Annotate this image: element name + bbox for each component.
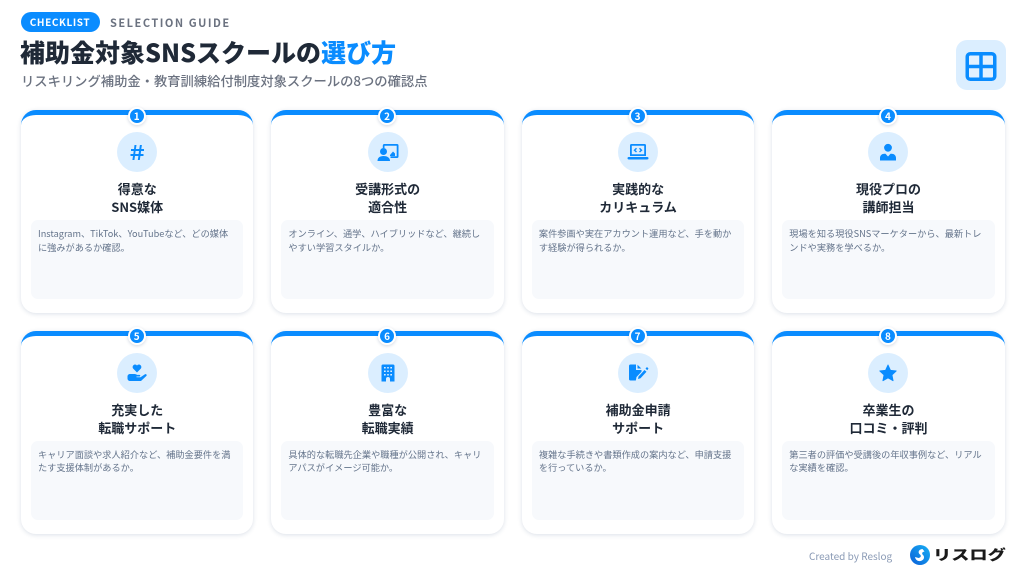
heading <box>856 179 921 216</box>
subtitle: リスキリング補助金・教育訓練給付制度対象スクールの8つの確認点 <box>21 71 428 90</box>
number 2: 2 <box>384 108 390 122</box>
heading: 受講形式の <box>355 179 420 198</box>
description: 複雑な手続きや書類作成の案内など、申請支援 <box>539 447 731 461</box>
heading <box>111 179 163 216</box>
icon: caring hand <box>117 353 157 393</box>
number 5 <box>128 327 146 345</box>
heading: カリキュラム <box>599 197 677 216</box>
description: ンドや実務を学べるか。 <box>789 240 890 254</box>
description <box>31 220 243 299</box>
description: 現場を知る現役SNSマーケターから、最新トレ <box>789 226 981 240</box>
heading: SNS媒体 <box>111 197 163 216</box>
icon: building <box>368 353 408 393</box>
description: アパスがイメージ可能か。 <box>288 460 398 474</box>
title: 補助金対象SNSスクールの選び方 <box>20 34 396 70</box>
heading: 得意な <box>118 179 157 198</box>
description <box>532 441 744 520</box>
heading: 充実した <box>111 400 163 419</box>
number 6: 6 <box>384 328 390 343</box>
description: 第三者の評価や受講後の年収事例など、リアル <box>789 447 982 461</box>
heading: サポート <box>612 418 664 437</box>
icon: star <box>868 353 908 393</box>
description: キャリア面談や求人紹介など、補助金要件を満 <box>38 447 230 461</box>
description: を行っているか。 <box>539 460 612 474</box>
eyebrow: SELECTION GUIDE: SELECTION GUIDE <box>110 15 231 31</box>
number 7 <box>629 327 647 345</box>
badge: CHECKLIST <box>20 12 100 32</box>
description: Instagram、TikTok、YouTubeなど、どの媒体 <box>38 226 228 240</box>
panel: card 5 <box>21 331 253 534</box>
number 7: 7 <box>635 328 641 343</box>
number 3: 3 <box>635 108 641 122</box>
number 3 <box>629 106 647 124</box>
panel: card 4 <box>772 110 1005 313</box>
panel: card 7 <box>522 331 754 534</box>
description: やすい学習スタイルか。 <box>288 240 389 254</box>
panel: card 2 <box>271 110 504 313</box>
icon: presentation <box>368 132 408 172</box>
panel: card 1 <box>21 110 253 313</box>
description <box>782 220 995 299</box>
description <box>281 220 494 299</box>
heading: 卒業生の <box>862 400 914 419</box>
heading: 実践的な <box>612 179 664 198</box>
number 8 <box>879 327 897 345</box>
icon: document sign <box>618 353 658 393</box>
description: 具体的な転職先企業や職種が公開され、キャリ <box>288 447 481 461</box>
heading <box>98 400 176 437</box>
description: たす支援体制があるか。 <box>38 460 139 474</box>
number 4: 4 <box>885 108 891 122</box>
number 1: 1 <box>134 108 140 122</box>
heading: 豊富な <box>368 400 407 419</box>
description: す経験が得られるか。 <box>539 240 631 254</box>
icon: hashtag <box>117 132 157 172</box>
panel: card 8 <box>772 331 1005 534</box>
heading: 講師担当 <box>862 197 914 216</box>
heading <box>599 179 677 216</box>
badge: CHECKLIST: CHECKLIST <box>30 14 90 29</box>
description: に強みがあるか確認。 <box>38 240 130 254</box>
panel: card 3 <box>522 110 754 313</box>
description <box>532 220 744 299</box>
description <box>31 441 243 520</box>
number 1 <box>128 106 146 124</box>
heading <box>355 179 420 216</box>
description <box>782 441 995 520</box>
number 4 <box>879 106 897 124</box>
panel: card 6 <box>271 331 504 534</box>
icon: instructor <box>868 132 908 172</box>
icon: laptop code <box>618 132 658 172</box>
icon: grid <box>956 40 1006 90</box>
heading <box>362 400 414 437</box>
description: な実績を確認。 <box>789 460 854 474</box>
description: 案件参画や実在アカウント運用など、手を動か <box>539 226 731 240</box>
heading: 適合性 <box>368 197 407 216</box>
footer credit: Created by Reslog <box>809 548 892 563</box>
heading <box>849 400 928 437</box>
heading <box>606 400 671 437</box>
description <box>281 441 494 520</box>
heading: 口コミ・評判 <box>849 418 928 437</box>
number 5: 5 <box>134 328 140 343</box>
heading: 転職サポート <box>98 418 176 437</box>
number 6 <box>378 327 396 345</box>
heading: 現役プロの <box>856 179 921 198</box>
heading: 補助金申請 <box>606 400 671 419</box>
heading: 転職実績 <box>362 418 414 437</box>
number 8: 8 <box>885 328 891 343</box>
description: オンライン、通学、ハイブリッドなど、継続し <box>288 226 480 240</box>
number 2 <box>378 106 396 124</box>
logo: Reslog: リスログ <box>933 545 1006 565</box>
